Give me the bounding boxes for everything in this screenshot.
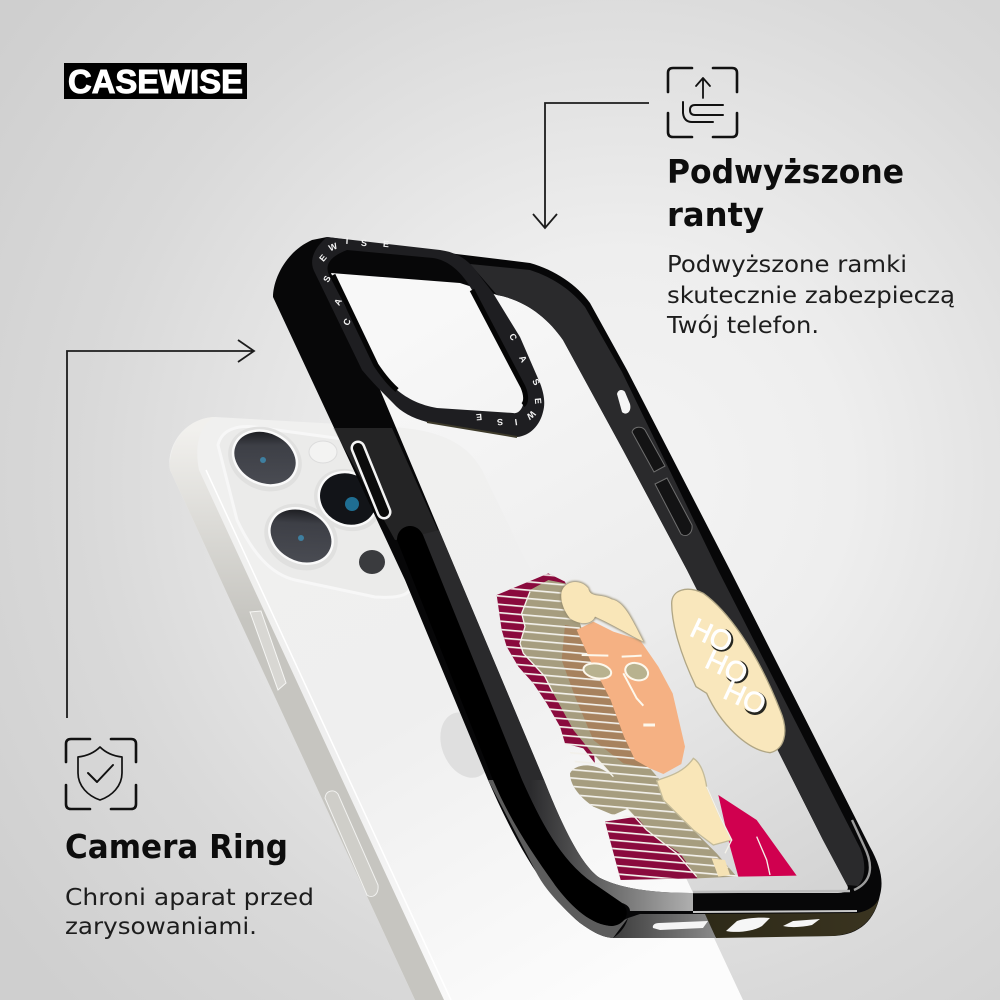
- text: camera ring description: Chroni aparat przed: [65, 885, 314, 911]
- clear case: [273, 237, 882, 938]
- lens top: [217, 415, 313, 503]
- ring lettering: C: [341, 316, 353, 327]
- ring lettering: W: [327, 241, 339, 253]
- illustration: Santa: [497, 573, 797, 880]
- ring edge shine: [427, 422, 517, 437]
- left frame outer grey lip: [488, 780, 628, 938]
- bottom strip olive: [705, 898, 879, 938]
- ring lettering: S: [530, 377, 542, 387]
- phone behind the case: [169, 415, 743, 1000]
- frame over phone tint: [333, 428, 440, 540]
- speech bubble: [672, 589, 785, 753]
- side button 2: [655, 478, 692, 536]
- ring lettering: E: [317, 252, 329, 264]
- text: raised edges description: skutecznie zabezpieczą: [667, 283, 955, 309]
- eyes and features: [582, 655, 655, 725]
- left frame inner panel: [420, 530, 544, 780]
- hair: [561, 582, 643, 642]
- ring lettering: E: [476, 412, 482, 422]
- ring lettering: S: [497, 417, 503, 427]
- port left: [653, 921, 708, 930]
- camera plateau: [218, 427, 410, 597]
- ring lettering: C: [507, 332, 519, 343]
- lidar sensor: [359, 550, 385, 574]
- side button upper: [250, 611, 286, 690]
- ring lettering: S: [361, 238, 367, 248]
- ring bevel: [333, 275, 526, 405]
- HO text: [685, 612, 771, 722]
- right frame inner panel: [470, 264, 864, 886]
- ring lettering: E: [383, 239, 389, 249]
- ring lettering: A: [517, 354, 529, 365]
- case frame: [273, 237, 882, 938]
- O shadows: [710, 628, 733, 652]
- heading: raised edges: Podwyższone: [667, 152, 904, 191]
- port middle: [726, 918, 770, 932]
- ring lettering: [317, 236, 543, 427]
- ring lettering: I: [345, 236, 349, 246]
- ring lettering: S: [321, 274, 333, 284]
- hood: [497, 573, 595, 763]
- volume pill button: [358, 448, 384, 512]
- cuff fur: [570, 765, 631, 815]
- lens right: [303, 457, 393, 543]
- hair soft edge: [561, 582, 643, 642]
- jacket left: [605, 817, 697, 880]
- text: camera ring description: [65, 885, 314, 940]
- heading: camera ring: Camera Ring: [65, 827, 288, 866]
- fur and beard shade: [520, 580, 737, 878]
- apple logo: [431, 704, 501, 786]
- hair fill: [561, 582, 643, 642]
- flash: [309, 441, 337, 463]
- rim highlight line: [206, 470, 451, 1000]
- text: camera ring description: zarysowaniami.: [65, 914, 257, 940]
- lens bottom: [252, 491, 350, 583]
- inner bottom rim: [693, 891, 850, 892]
- ring lettering: E: [533, 398, 543, 404]
- right frame grey rim: [852, 820, 870, 890]
- phone side rim: [170, 417, 444, 1000]
- side button 1: [632, 427, 665, 472]
- face shade: [562, 625, 650, 768]
- HO text: HO: [700, 644, 752, 691]
- heading: raised edges: ranty: [667, 195, 764, 234]
- left black slot: [397, 526, 627, 926]
- hatching: [497, 573, 738, 880]
- camera ring: [312, 236, 544, 437]
- HO text: HO: [719, 675, 771, 722]
- ring lettering: W: [524, 408, 537, 422]
- side button lower: [325, 791, 378, 897]
- text: raised edges description: Twój telefon.: [666, 313, 819, 339]
- heading: raised edges: [667, 152, 904, 234]
- bottom highlight: [693, 911, 857, 912]
- jacket right: [718, 795, 797, 877]
- ring lettering: A: [332, 296, 344, 307]
- logo: CASEWISE: [68, 63, 243, 100]
- text: raised edges description: Podwyższone ramki: [667, 252, 907, 278]
- top button hole: [617, 390, 630, 414]
- beard tip: [712, 858, 730, 877]
- HO text: HO: [685, 612, 737, 659]
- text: raised edges description: [666, 252, 955, 339]
- arrow to raised edges: [533, 103, 649, 228]
- left frame lower panel fading over phone: [522, 780, 693, 911]
- icon: raised edges: [668, 68, 737, 137]
- ring lettering: I: [514, 417, 518, 427]
- arrow to camera ring: [67, 340, 254, 718]
- icon: shield: [66, 739, 136, 809]
- face: [577, 622, 685, 774]
- fur outline: [520, 592, 770, 877]
- beard: [657, 758, 732, 845]
- clear case back tint: [331, 273, 848, 893]
- port right: [783, 919, 820, 927]
- bottom strip grey: [613, 914, 716, 938]
